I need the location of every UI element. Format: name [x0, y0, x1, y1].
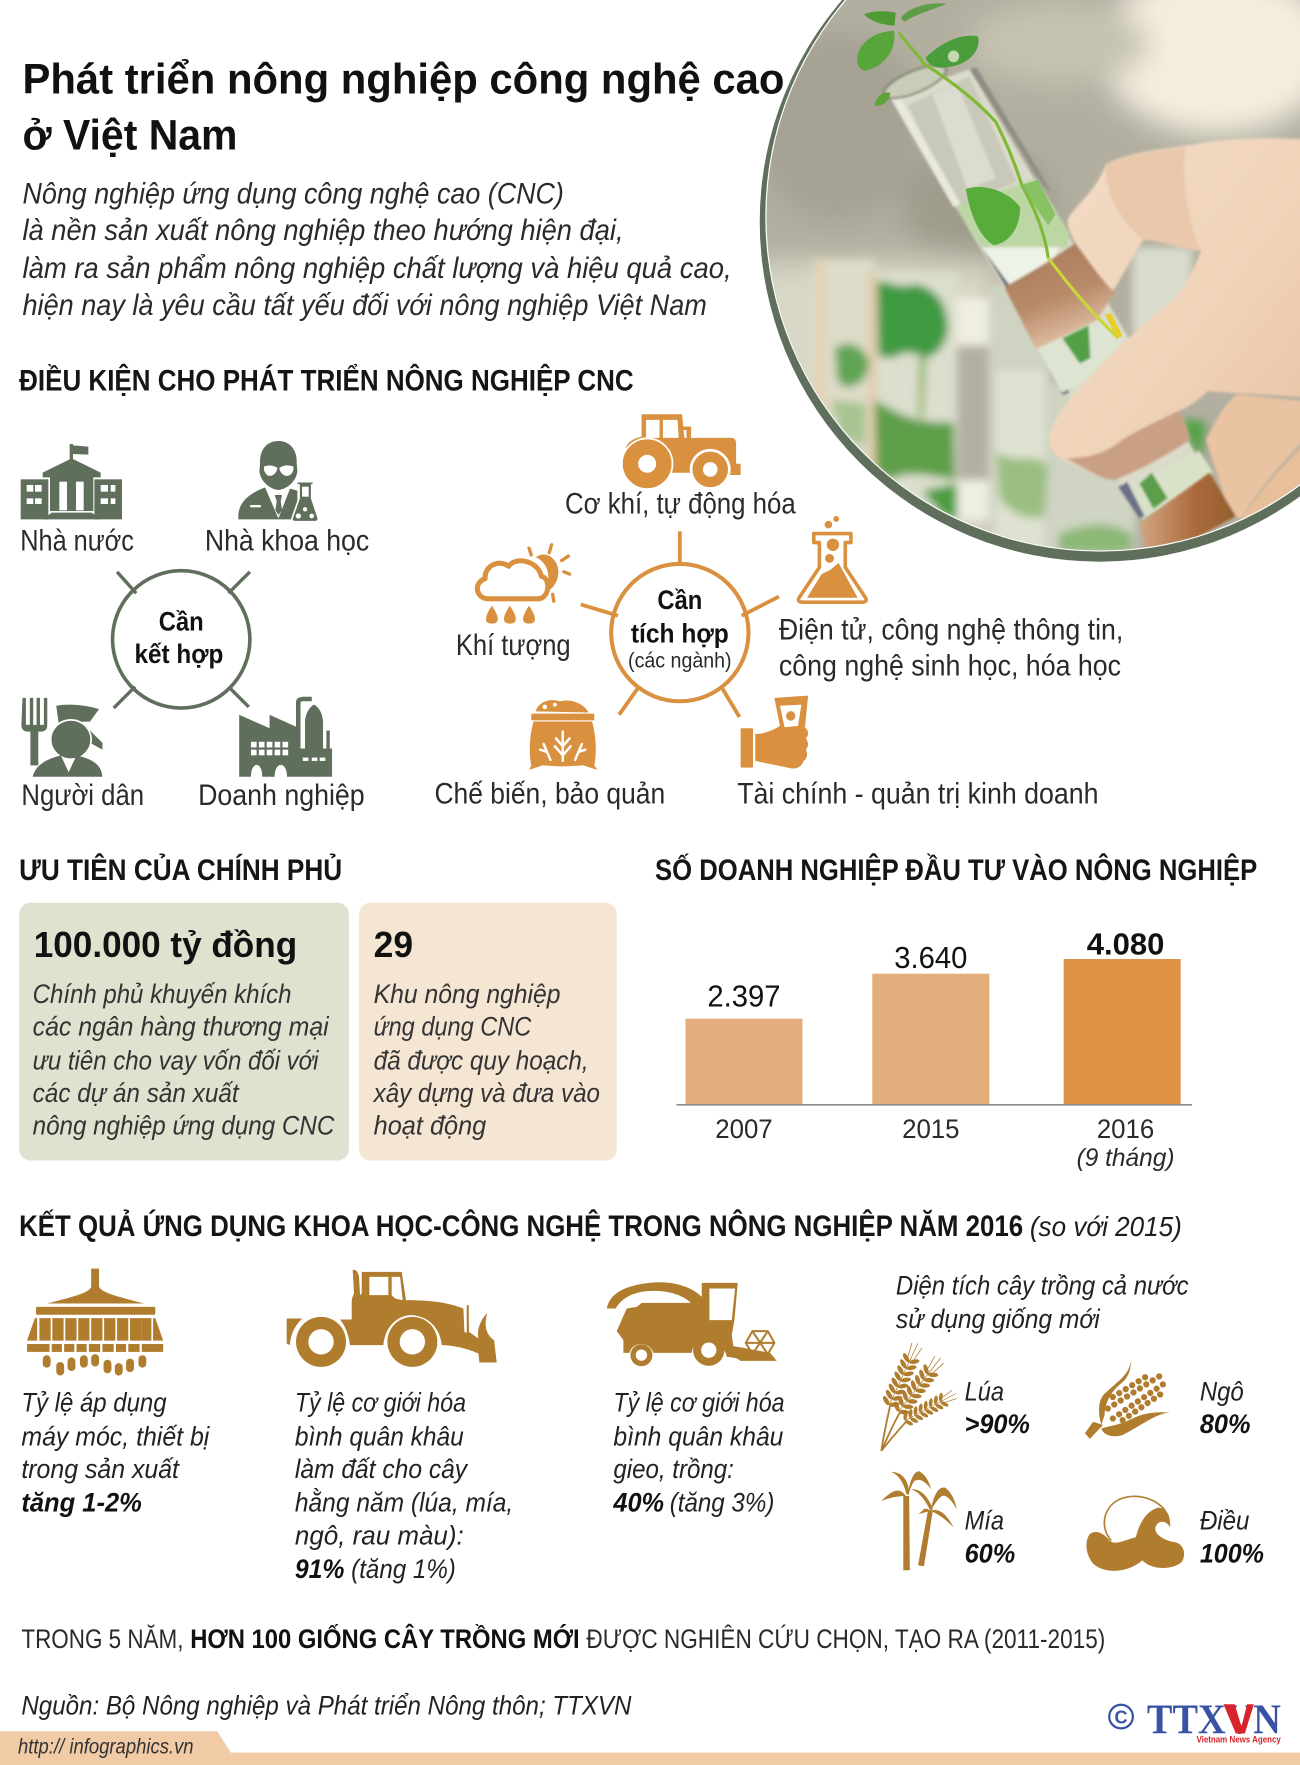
heading: results: (so với 2015) [1030, 1211, 1182, 1242]
intro text block [23, 179, 732, 322]
label: rice: >90% [965, 1409, 1030, 1439]
icon: grain sack [529, 700, 598, 770]
description: nông nghiệp ứng dụng CNC [33, 1111, 335, 1141]
center label: Cần [657, 585, 702, 615]
heading: conditions: ĐIỀU KIỆN CHO PHÁT TRIỂN NÔNG NGHIỆP CNC [19, 364, 634, 398]
icon: harvester [607, 1282, 777, 1366]
description [612, 1388, 785, 1518]
label: sugarcane: Mía [965, 1506, 1004, 1536]
label: rice: Lúa [965, 1376, 1004, 1406]
label: state: Nhà nước [20, 525, 134, 557]
photo: test tube with seedling held by gloved hand [750, 0, 1300, 582]
text block: five years note: HƠN 100 GIỐNG CÂY TRỒNG MỚI [190, 1622, 580, 1654]
soil [1004, 244, 1115, 349]
intro text block: làm ra sản phẩm nông nghiệp chất lượng và hiệu quả cao, [23, 253, 732, 285]
description: tăng 1-2% [21, 1488, 142, 1518]
label: corn: Ngô [1200, 1376, 1244, 1406]
description: ưu tiên cho vay vốn đối với [33, 1045, 319, 1075]
icon: seeder [27, 1269, 163, 1376]
label: cashew: Điều [1200, 1506, 1249, 1536]
description: bình quân khâu [613, 1421, 783, 1451]
label: business: Doanh nghiệp [198, 780, 365, 812]
description: xây dựng và đưa vào [372, 1078, 600, 1108]
logo: TTXVN: Vietnam News Agency [1196, 1734, 1281, 1744]
description [21, 1388, 210, 1518]
center label: kết hợp [135, 639, 223, 669]
description: Tỷ lệ áp dụng [21, 1388, 167, 1418]
icon: farmer [21, 698, 102, 777]
bar chart: 2.397 [707, 979, 781, 1013]
description: hằng năm (lúa, mía, [295, 1487, 513, 1518]
icon: scientist [238, 441, 318, 522]
panel: area using new varieties [879, 1270, 1264, 1571]
icon: flask [798, 516, 866, 602]
description: đã được quy hoạch, [374, 1045, 589, 1075]
rim [882, 64, 948, 101]
heading: results: KẾT QUẢ ỨNG DỤNG KHOA HỌC-CÔNG NGHỆ TRONG NÔNG NGHIỆP NĂM 2016 [19, 1209, 1023, 1243]
description: 91% [295, 1554, 344, 1584]
description: bình quân khâu [295, 1421, 464, 1451]
text block: five years note: ĐƯỢC NGHIÊN CỨU CHỌN, TẠO RA (2011-2015) [586, 1623, 1105, 1654]
icon: cashew [1086, 1496, 1184, 1571]
center label: (các ngành) [628, 649, 732, 673]
value: 100.000 tỷ đồng [34, 924, 297, 965]
text block: five years note: TRONG 5 NĂM, [21, 1624, 183, 1654]
description: các dự án sản xuất [33, 1078, 240, 1108]
description [33, 979, 335, 1141]
icon: sugarcane [881, 1471, 957, 1570]
panel: result 1 machinery [21, 1269, 210, 1518]
label: mechanics: Cơ khí, tự động hóa [565, 488, 796, 520]
panel: result 2 soil preparation [287, 1270, 513, 1584]
description: 40% [612, 1488, 664, 1518]
icon: loader tractor [287, 1270, 497, 1367]
bar chart: 3.640 [894, 941, 967, 975]
description: Diện tích cây trồng cả nước [896, 1270, 1189, 1300]
label: electronics: công nghệ sinh học, hóa học [779, 650, 1121, 682]
center label [135, 606, 223, 669]
label: electronics: Điện tử, công nghệ thông tin, [779, 614, 1123, 646]
stem and leaves [899, 33, 1048, 258]
description: (tăng 3%) [670, 1488, 774, 1518]
heading: government priority: ƯU TIÊN CỦA CHÍNH PHỦ [19, 853, 342, 887]
footer band [0, 1731, 1300, 1765]
description [896, 1270, 1189, 1334]
intro text block: là nền sản xuất nông nghiệp theo hướng hiện đại, [23, 215, 624, 247]
main test tube [880, 59, 1213, 520]
panel: 29 zones [359, 903, 617, 1161]
label: processing: Chế biến, bảo quản [434, 779, 665, 811]
title: Phát triển nông nghiệp công nghệ cao [23, 55, 785, 103]
label: people: Người dân [21, 780, 144, 812]
bar chart: 2015 [902, 1114, 960, 1144]
description: hoạt động [374, 1111, 486, 1141]
center circle [611, 564, 748, 701]
lab blocks [955, 298, 992, 345]
center label [628, 585, 732, 673]
bar chart: 4.080 [1087, 928, 1164, 962]
gloved hand [1049, 138, 1300, 549]
description: (tăng 1%) [351, 1554, 456, 1584]
icon: hand with money [741, 696, 808, 769]
label: sugarcane [965, 1506, 1015, 1568]
center circle [113, 571, 250, 708]
description: làm đất cho cây [295, 1454, 468, 1484]
source: Nguồn: Bộ Nông nghiệp và Phát triển Nông thôn; TTXVN [21, 1690, 632, 1720]
description: máy móc, thiết bị [21, 1421, 210, 1451]
bar chart: 2016 [1097, 1114, 1154, 1144]
description: Tỷ lệ cơ giới hóa [295, 1388, 466, 1418]
value: 29 [374, 924, 413, 965]
icon: weather [477, 545, 570, 624]
description: các ngân hàng thương mại [33, 1012, 330, 1042]
plants in back tubes [877, 282, 948, 358]
panel: result 3 sowing [607, 1282, 785, 1518]
center label: Cần [159, 606, 204, 636]
description: Khu nông nghiệp [374, 979, 561, 1009]
description: Tỷ lệ cơ giới hóa [613, 1388, 785, 1418]
bar chart: 2007 [715, 1114, 773, 1144]
description: sử dụng giống mới [896, 1304, 1101, 1334]
label: corn: 80% [1200, 1409, 1250, 1439]
icon: government building [21, 444, 122, 519]
bar chart [676, 928, 1192, 1172]
description: Chính phủ khuyến khích [33, 979, 292, 1009]
logo: TTXVN: C [1115, 1707, 1128, 1727]
label: scientist: Nhà khoa học [205, 525, 369, 557]
center label: tích hợp [631, 619, 729, 649]
text block: five years note [21, 1622, 1105, 1654]
icon: factory [239, 697, 332, 777]
panel: need to integrate (orange) [434, 414, 1123, 811]
label: meteorology: Khí tượng [456, 630, 571, 662]
label: rice [965, 1376, 1030, 1439]
intro text block: Nông nghiệp ứng dụng công nghệ cao (CNC) [23, 179, 564, 211]
description: trong sản xuất [21, 1454, 180, 1484]
logo: TTXVN: TTXVN [1147, 1696, 1281, 1743]
icon: corn [1085, 1361, 1170, 1439]
bar chart: (9 tháng) [1077, 1145, 1175, 1172]
icon: tractor [622, 414, 741, 489]
icon: rice [879, 1339, 960, 1451]
description: gieo, trồng: [613, 1454, 734, 1484]
description: ngô, rau màu): [295, 1520, 464, 1550]
panel: 100.000 billion dong [19, 903, 349, 1161]
description [295, 1388, 513, 1584]
website: http:// infographics.vn [18, 1735, 194, 1759]
label: cashew [1200, 1506, 1264, 1568]
label: corn [1200, 1376, 1250, 1439]
label: electronics [779, 614, 1123, 682]
label: cashew: 100% [1200, 1538, 1264, 1568]
panel: need to combine (green) [20, 441, 369, 812]
description: ứng dụng CNC [374, 1012, 532, 1042]
description [372, 979, 600, 1141]
label: sugarcane: 60% [965, 1538, 1015, 1568]
title [23, 55, 785, 160]
title: ở Việt Nam [23, 112, 237, 160]
label: finance: Tài chính - quản trị kinh doanh [737, 779, 1099, 811]
intro text block: hiện nay là yêu cầu tất yếu đối với nông nghiệp Việt Nam [23, 290, 707, 322]
plant water section [955, 178, 1069, 247]
